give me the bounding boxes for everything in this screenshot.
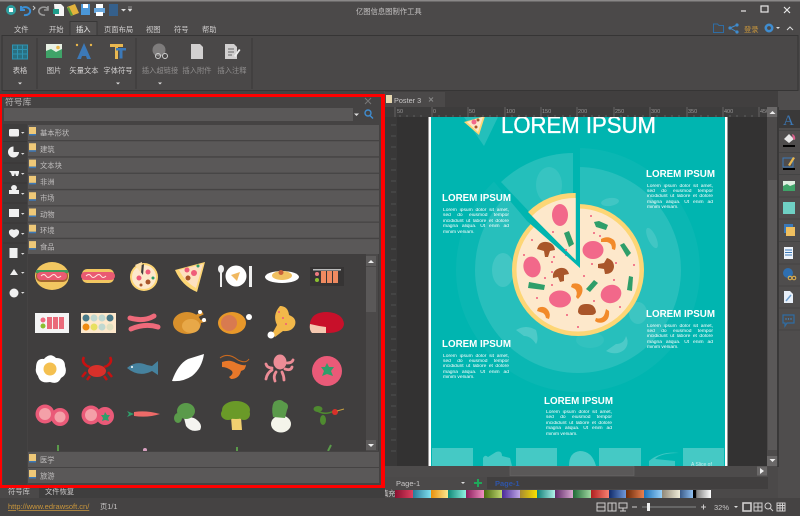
icon: sushi platter <box>81 313 116 333</box>
horizontal ruler: 400 <box>724 109 733 115</box>
next row hints <box>58 445 331 451</box>
horizontal ruler: 150 <box>542 109 551 115</box>
icon: pizza slice <box>175 262 205 292</box>
status: page count: 页1/1 <box>100 502 117 511</box>
symbol library panel <box>0 91 384 487</box>
pizza slice <box>528 193 576 260</box>
ribbon tabs: 符号 <box>174 25 189 34</box>
quick access toolbar <box>6 4 132 16</box>
ribbon: picture button <box>46 44 62 75</box>
icon: herb <box>314 406 344 425</box>
ribbon tabs: 开始 <box>49 25 64 34</box>
icon: drumstick <box>268 306 295 338</box>
icon: white radish <box>172 354 204 381</box>
category rows: 医学 <box>40 456 55 464</box>
vertical ruler ticks <box>391 125 396 451</box>
ribbon tabs: 文件 <box>14 25 29 34</box>
heading: right bottom: LOREM IPSUM <box>646 308 715 320</box>
category rows: 市场 <box>40 194 55 203</box>
ribbon tabs: 页面布局 <box>104 25 133 34</box>
status bar <box>0 498 800 516</box>
icon: sausages <box>130 316 158 329</box>
document tab: Poster 3 <box>394 96 421 105</box>
horizontal scrollbar <box>385 466 768 477</box>
heading: left top: LOREM IPSUM <box>442 192 511 204</box>
icon: fish <box>127 361 158 375</box>
status: website link: http://www.edrawsoft.cn/ <box>8 502 90 511</box>
ribbon: comment button <box>217 44 247 75</box>
heading: right top: LOREM IPSUM <box>646 168 715 180</box>
tool: page <box>784 247 793 259</box>
icon: hot dog <box>81 269 115 283</box>
horizontal ruler: 50 <box>469 109 475 115</box>
fill label: 填充 <box>381 489 396 498</box>
cut slice background <box>501 153 573 258</box>
horizontal ruler: 100 <box>506 109 515 115</box>
ribbon: vector text button <box>69 43 99 75</box>
body text: right top: sed do eiusmod tempor <box>647 189 713 194</box>
ribbon: table button <box>12 45 28 84</box>
pizza main <box>512 204 644 336</box>
body text: right top: minim veniam. <box>647 205 679 210</box>
body text: right top: Lorem ipsum dolor sit amet, <box>647 184 713 188</box>
grid scrollbar <box>366 254 378 451</box>
bottom strip squares <box>432 448 724 468</box>
category rows <box>28 125 379 483</box>
status bar: 32% <box>714 503 729 512</box>
tool: image <box>783 181 795 191</box>
body text: left bottom: magna aliqua. Ut enim ad <box>443 370 509 375</box>
icon: bok choy <box>174 403 201 431</box>
heading: center bottom: LOREM IPSUM <box>544 395 613 407</box>
pizza cut gap <box>494 148 580 268</box>
ribbon: comment button: 插入注释 <box>217 66 247 75</box>
search box <box>4 108 373 121</box>
category sidebar <box>3 124 27 486</box>
icon: plate with cutlery <box>218 265 252 287</box>
ribbon tabs: 视图 <box>146 25 161 34</box>
icon: steak <box>310 312 344 333</box>
icon: roast chicken <box>173 310 206 334</box>
ribbon: picture button: 图片 <box>47 66 61 75</box>
horizontal ruler: 0 <box>433 109 436 115</box>
category rows: 非洲 <box>40 177 55 186</box>
window title: 亿图信息图制作工具 <box>356 7 422 16</box>
body text: center bottom: Lorem ipsum dolor sit amet, <box>546 410 612 415</box>
icon: radish <box>271 400 291 432</box>
category rows: 建筑 <box>40 145 55 154</box>
red highlight frame <box>0 94 385 488</box>
category rows: 食品 <box>40 242 55 252</box>
body text: right bottom <box>647 324 713 350</box>
tool: fill <box>783 134 795 147</box>
body text: right top: incididunt ut labore et dolore <box>647 194 713 199</box>
horizontal ruler: 200 <box>578 109 587 115</box>
body text: right top: magna aliqua. Ut enim ad <box>647 200 713 205</box>
body text: right bottom: magna aliqua. Ut enim ad <box>647 340 713 345</box>
panel title: 符号库 <box>5 96 32 107</box>
body text: left bottom <box>443 354 509 380</box>
body text: left top: minim veniam. <box>443 230 475 235</box>
ribbon: hyperlink button: 插入超链接 <box>142 66 179 75</box>
ribbon panel <box>2 36 798 90</box>
bottom strip squares: A Slice of <box>691 462 712 468</box>
body text: center bottom: incididunt ut labore et dolore <box>546 421 612 426</box>
body text: right top <box>647 184 713 210</box>
poster title icon <box>464 116 498 146</box>
canvas area <box>385 91 778 477</box>
body text: center bottom: sed do eiusmod tempor <box>546 415 612 420</box>
panel tabs: 文件恢复 <box>45 487 75 496</box>
document tab <box>385 92 445 107</box>
body text: right bottom: Lorem ipsum dolor sit amet, <box>647 324 713 328</box>
ribbon: attachment button <box>182 44 212 75</box>
body text: left bottom: minim veniam. <box>443 375 475 380</box>
colour palette <box>395 490 711 498</box>
icon: carrot <box>127 411 160 417</box>
body text: left top: Lorem ipsum dolor sit amet, <box>443 208 509 213</box>
window controls <box>741 6 790 13</box>
ribbon: attachment button: 插入附件 <box>182 66 212 75</box>
body text: right bottom: sed do eiusmod tempor <box>647 329 713 334</box>
icon: sashimi tray <box>35 313 69 333</box>
tool: hyperlink <box>783 268 796 280</box>
page tabs: Page-1 <box>396 479 420 488</box>
icon: tomato slices <box>36 404 69 426</box>
category rows: 动物 <box>40 210 55 219</box>
icon: pizza <box>130 262 158 291</box>
category rows: 环境 <box>40 226 55 235</box>
icon: octopus <box>266 354 293 381</box>
ribbon tabs: 帮助 <box>202 25 217 34</box>
icon: tomato <box>312 356 342 386</box>
ribbon: font symbol button <box>103 44 133 84</box>
icon: broccoli <box>221 401 250 430</box>
status: view controls <box>597 503 785 511</box>
body text: right bottom: incididunt ut labore et dolore <box>647 334 713 339</box>
body text: left top: incididunt ut labore et dolore <box>443 219 509 224</box>
symbol grid <box>28 254 379 452</box>
ribbon: table button: 表格 <box>13 66 28 75</box>
panel close <box>365 98 371 104</box>
horizontal ruler: 350 <box>688 109 697 115</box>
icon: shrimp <box>220 355 249 379</box>
body text: left top: magna aliqua. Ut enim ad <box>443 224 509 229</box>
horizontal ruler: 50 <box>397 109 403 115</box>
tool: text: A <box>783 113 794 129</box>
poster title: LOREM IPSUM <box>501 112 656 139</box>
right tool strip <box>778 91 800 516</box>
category rows: 文本块 <box>40 161 63 170</box>
body text: left bottom: sed do eiusmod tempor <box>443 359 509 364</box>
body text: right bottom: minim veniam. <box>647 345 679 350</box>
icon: burger <box>35 262 69 290</box>
account toolbar <box>714 23 793 34</box>
body text: center bottom: magna aliqua. Ut enim ad <box>546 426 612 431</box>
icon: sushi tray dark <box>310 267 344 286</box>
category rows: 基本形状 <box>40 128 70 138</box>
icon: spaghetti <box>265 270 299 283</box>
tool: shape color <box>783 202 795 214</box>
icon: ham <box>218 312 252 334</box>
category rows: 旅游 <box>40 472 55 480</box>
panel tabs <box>0 487 385 498</box>
page tabs <box>385 477 768 489</box>
ribbon: hyperlink button <box>142 44 179 84</box>
horizontal ruler: 300 <box>651 109 660 115</box>
icon: crab <box>82 357 112 380</box>
tool: attachment <box>784 291 793 303</box>
horizontal ruler: 450 <box>760 109 769 115</box>
vertical scrollbar <box>767 107 778 467</box>
body text: center bottom <box>546 410 612 437</box>
tool: comment <box>783 315 794 326</box>
horizontal ruler <box>385 107 769 117</box>
icon: tomato half <box>82 406 114 425</box>
ribbon tabs: 插入 <box>76 25 91 34</box>
body text: left top <box>443 208 509 235</box>
ribbon: font symbol button: 字体符号 <box>103 66 133 75</box>
heading: left bottom: LOREM IPSUM <box>442 338 511 350</box>
body text: center bottom: minim veniam. <box>546 432 578 437</box>
page tabs: Page-1 <box>495 479 520 488</box>
pizza background rings <box>456 148 700 392</box>
body text: left bottom: incididunt ut labore et dolore <box>443 364 509 369</box>
tool: line <box>783 157 795 170</box>
body text: left top: sed do eiusmod tempor <box>443 213 509 218</box>
ribbon: vector text button: 矢量文本 <box>69 66 99 75</box>
tool: layers <box>784 224 795 236</box>
body text: left bottom: Lorem ipsum dolor sit amet, <box>443 354 509 358</box>
icon: fried egg <box>36 355 66 383</box>
panel tabs: 符号库 <box>8 487 30 496</box>
account toolbar: 登录 <box>744 25 759 34</box>
poster page <box>428 110 728 470</box>
horizontal ruler: 250 <box>615 109 624 115</box>
ribbon tabs <box>14 22 217 36</box>
